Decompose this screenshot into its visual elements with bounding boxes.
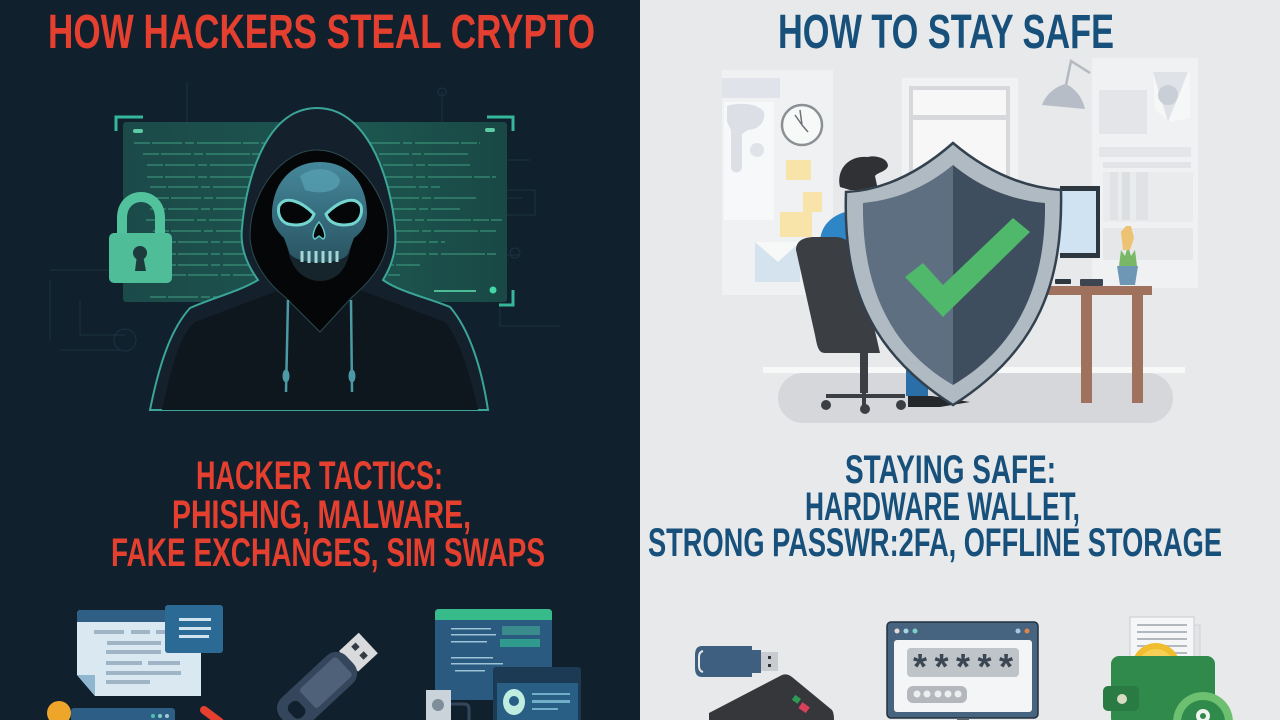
hoodie drawstrings xyxy=(283,300,355,392)
subheading: staying safe: STAYING SAFE: xyxy=(845,448,1056,492)
corner brackets xyxy=(116,117,513,305)
icon: offline storage wallet xyxy=(1103,617,1233,720)
subheading: staying safe: HARDWARE WALLET, xyxy=(805,485,1080,529)
sticky notes xyxy=(780,160,822,237)
title: how hackers steal crypto: HOW HACKERS STEAL CRYPTO xyxy=(48,6,595,59)
office room background xyxy=(722,58,1198,373)
icon: sim swap screens xyxy=(426,609,581,720)
icon: hardware wallet device xyxy=(709,674,834,720)
icon: hardware wallet usb xyxy=(695,646,778,677)
subheading: hacker tactics: HACKER TACTICS: xyxy=(196,454,443,498)
hooded hacker xyxy=(150,108,488,410)
subheading: hacker tactics: FAKE EXCHANGES, SIM SWAPS xyxy=(111,531,545,575)
desk xyxy=(1048,286,1152,403)
person at desk xyxy=(820,156,970,407)
hood opening xyxy=(250,150,388,332)
subheading: hacker tactics: PHISHNG, MALWARE, xyxy=(172,493,471,537)
potted plant xyxy=(1117,226,1138,285)
subheading: hacker tactics xyxy=(111,454,545,575)
skull xyxy=(272,162,367,281)
icon: security shield with check xyxy=(846,143,1061,405)
icon: fake exchange window with coin xyxy=(47,701,175,720)
icon: malware usb drive xyxy=(271,629,381,720)
desk lamp xyxy=(1042,61,1090,109)
office chair xyxy=(796,237,906,414)
icon: envelope xyxy=(755,242,800,282)
hoodie xyxy=(150,108,488,410)
computer monitor xyxy=(1055,186,1103,286)
icon: phishing email xyxy=(77,605,223,696)
hoodie torso xyxy=(162,290,478,410)
icon: password screen xyxy=(887,622,1038,720)
check mark xyxy=(905,218,1030,317)
title: how to stay safe: HOW TO STAY SAFE xyxy=(778,6,1114,59)
panel: how to stay safe xyxy=(640,0,1280,720)
subheading: staying safe xyxy=(648,448,1222,565)
circuit background xyxy=(50,82,560,351)
panel: how hackers steal crypto xyxy=(0,0,640,720)
hacker code screen xyxy=(123,122,507,302)
icon: red arrow xyxy=(204,710,220,720)
icon: wall clock xyxy=(782,105,822,145)
password asterisks: ***** xyxy=(913,646,1013,687)
floor rug xyxy=(778,373,1173,423)
icon: padlock xyxy=(109,197,172,283)
